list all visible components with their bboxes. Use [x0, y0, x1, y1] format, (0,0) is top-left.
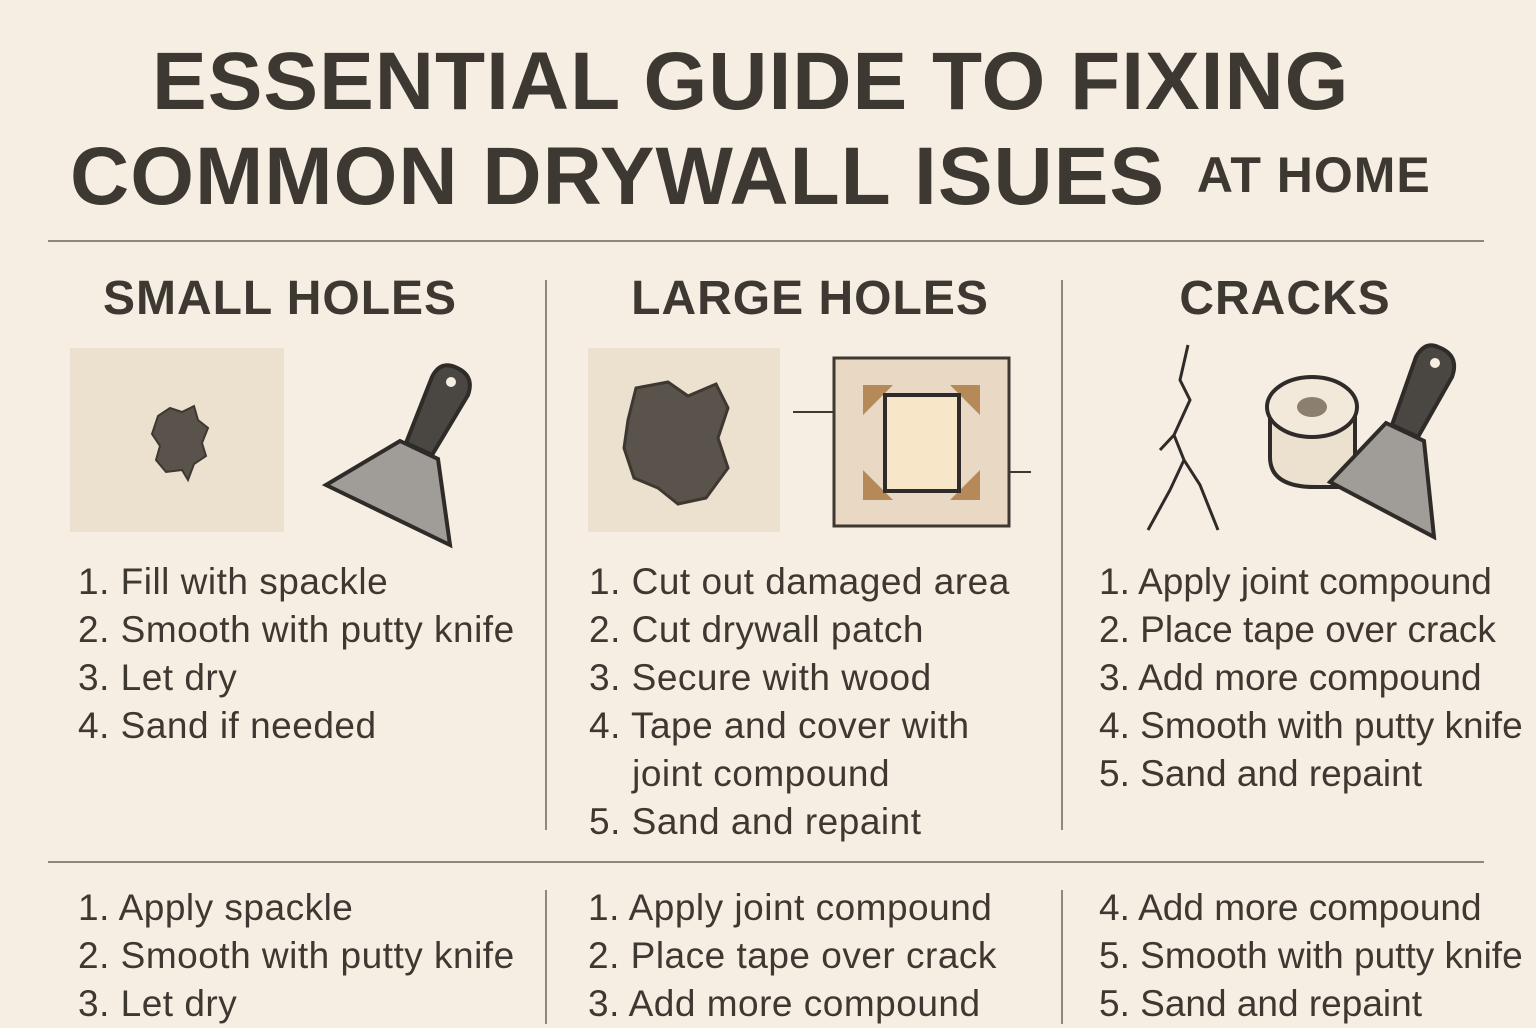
list: cracks steps [1099, 561, 1523, 794]
list: large holes steps: joint compound [632, 753, 890, 794]
list: large holes steps: 1. Cut out damaged area [589, 561, 1010, 602]
icon: drywall patch [793, 356, 1031, 528]
icon: small hole [70, 348, 284, 532]
list: small holes steps: 4. Sand if needed [78, 705, 377, 746]
list: bottom middle: 1. Apply joint compound [588, 887, 992, 928]
list: cracks steps: 2. Place tape over crack [1099, 609, 1496, 650]
list: cracks steps: 4. Smooth with putty knife [1099, 705, 1523, 746]
list: small holes steps: 1. Fill with spackle [78, 561, 388, 602]
icon: large hole [588, 348, 780, 532]
list: bottom left: 2. Smooth with putty knife [78, 935, 515, 976]
list: cracks steps: 5. Sand and repaint [1099, 753, 1422, 794]
list: bottom right: 4. Add more compound [1099, 887, 1482, 928]
list: large holes steps: 4. Tape and cover with [589, 705, 970, 746]
list: bottom left: 1. Apply spackle [78, 887, 353, 928]
list: bottom middle [588, 887, 997, 1024]
list: cracks steps: 3. Add more compound [1099, 657, 1482, 698]
panel: large holes [588, 272, 1031, 842]
panel: small holes [70, 272, 515, 746]
list: bottom middle: 2. Place tape over crack [588, 935, 997, 976]
heading: small holes: SMALL HOLES [103, 272, 457, 325]
list: bottom left: 3. Let dry [78, 983, 237, 1024]
list: small holes steps: 3. Let dry [78, 657, 237, 698]
icon: tape roll and knife [1265, 343, 1456, 540]
icon: crack [1146, 344, 1220, 531]
title: ESSENTIAL GUIDE TO FIXING [152, 36, 1349, 127]
title [70, 36, 1431, 222]
list: small holes steps: 2. Smooth with putty knife [78, 609, 515, 650]
heading: large holes: LARGE HOLES [631, 272, 989, 325]
list: bottom right: 5. Smooth with putty knife [1099, 935, 1523, 976]
list: large holes steps: 3. Secure with wood [589, 657, 932, 698]
panel: cracks [1099, 272, 1523, 794]
list: bottom right [1099, 887, 1523, 1024]
title: COMMON DRYWALL ISUES AT HOME [70, 131, 1431, 222]
list: large holes steps [589, 561, 1010, 842]
list: large holes steps: 5. Sand and repaint [589, 801, 921, 842]
list: small holes steps [78, 561, 515, 746]
list: cracks steps: 1. Apply joint compound [1099, 561, 1492, 602]
icon: putty knife [322, 363, 472, 548]
list: bottom middle: 3. Add more compound [588, 983, 981, 1024]
list: large holes steps: 2. Cut drywall patch [589, 609, 924, 650]
list: bottom left [78, 887, 515, 1024]
list: bottom right: 5. Sand and repaint [1099, 983, 1422, 1024]
heading: cracks: CRACKS [1179, 272, 1391, 325]
